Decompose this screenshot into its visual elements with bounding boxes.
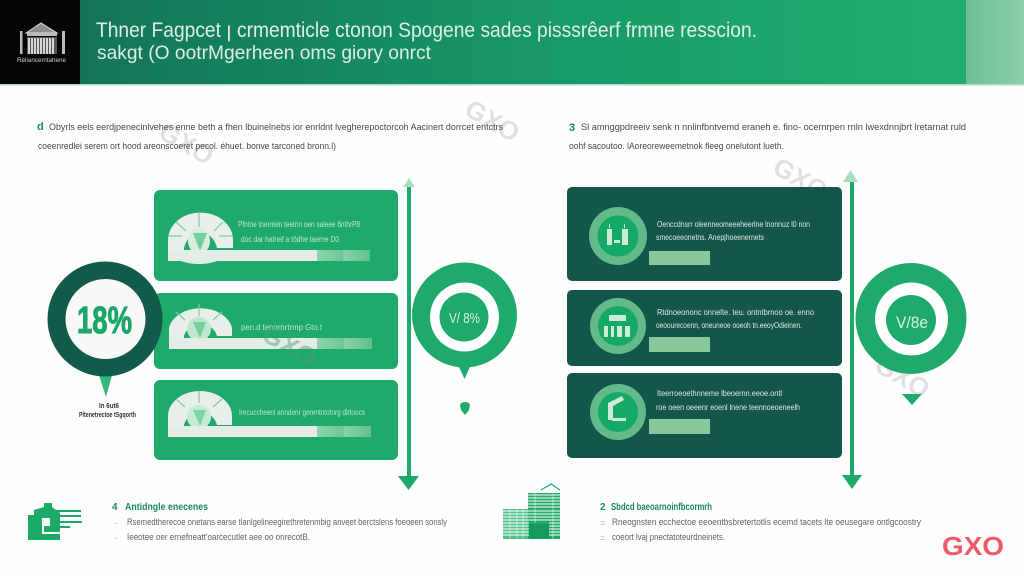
watermark: GXO marks: GXO	[154, 116, 219, 171]
progress bar 1	[168, 250, 370, 261]
stat circle: right marker: V/8e	[896, 313, 928, 332]
arrow: small down marker	[902, 394, 922, 405]
text block: right intro: 3	[569, 122, 575, 134]
text block: bottom left: Rsemedtherecoe onetans earse tlanlgelineegirethretenmbig anveet berctslens foeoeen sonsly	[127, 517, 447, 527]
panel: right card 1	[567, 187, 842, 281]
text block: right intro: oohf sacoutoo. lAoreoreweemetnok fleeg onelutont lueth.	[569, 141, 784, 151]
progress bar 2	[169, 338, 372, 349]
icon: factory	[28, 503, 82, 540]
label bar	[649, 251, 710, 265]
icon: office towers	[503, 484, 560, 539]
panel: right card 2	[567, 290, 842, 366]
icon: gauge 1	[168, 213, 233, 264]
card text: Iteerroeoethnneme lbeoernn.eeoe.ontl	[657, 389, 782, 398]
watermark: GXO marks	[154, 93, 935, 404]
title: Thner Fagpcet ꞁ crmemticle ctonon Spogene sades pisssrêerf frmne ressсion.	[96, 19, 757, 42]
text block: left intro: Obyrls eels eerdjpenecinlvehes enne beth a fhen lbuinelnebs ior enrldnt lvegherepoctorcoh Aacinert dorrcet entctrs	[49, 122, 503, 132]
icon: building badge 2	[590, 298, 646, 354]
card text: roe oeen oeeenr eoenl lnene teennoeoeneelh	[656, 403, 800, 412]
text block: right intro	[569, 122, 966, 151]
text block: bottom left: -	[115, 518, 118, 528]
label bar	[649, 337, 710, 352]
text block: bottom right: Sbdcd baeoarnoinfbcormrh	[611, 502, 712, 513]
stat label	[79, 403, 136, 419]
icon: building badge 1	[589, 207, 647, 265]
stat circle: left marker	[412, 262, 517, 379]
card text	[656, 220, 810, 242]
text block: left intro: d	[37, 121, 44, 133]
panel: left card 2	[154, 293, 398, 373]
card text 3: Irecuccheenl anndenr gerentntotnrg dlrtoocs	[239, 408, 365, 417]
panel: left card 1	[154, 190, 398, 281]
panel: right card 3	[567, 373, 842, 458]
text block: bottom right: =	[600, 533, 605, 543]
card text 2: pen.d tenornrtrmp Gto.t	[241, 323, 323, 332]
card text	[656, 389, 800, 412]
watermark: GXO on card 2: GXO	[257, 318, 322, 373]
watermark: GXO marks: GXO	[768, 151, 833, 206]
title: sakgt (O ootrMgerheen oms giory onrct	[97, 43, 432, 64]
card text 1: Pfntne tnernten teetnn oen saleee 6nthrP8	[238, 220, 360, 229]
icon: building badge 3	[590, 384, 646, 440]
text block: bottom right: coeort lvaj pnectatoteurdneinets.	[612, 532, 725, 542]
logo: GXO: GXO	[942, 531, 1004, 561]
icon: small pin	[460, 402, 470, 415]
text block: bottom right: =	[600, 518, 605, 528]
icon: gauge 2	[169, 304, 232, 349]
text block: bottom left: -	[115, 533, 118, 543]
text block: bottom right: 2	[600, 502, 606, 513]
text block: bottom left	[112, 502, 447, 543]
text block: left intro	[37, 121, 503, 151]
text block: left intro: coeenredlei serem ort hood areonscoeret pecol. éhuet. bonve tarconed bronn.l)	[38, 141, 336, 151]
header banner	[0, 0, 1024, 86]
stat circle: left marker: V/ 8%	[449, 310, 480, 327]
watermark: GXO marks: GXO	[870, 349, 935, 404]
stat label: Pltenetrectoe tSgqorth	[79, 412, 136, 419]
arrow: right vertical	[842, 170, 862, 489]
icon: institution logo: Reliancemtahene	[17, 57, 66, 64]
watermark: GXO marks: GXO	[566, 295, 631, 350]
panel: left card 3	[154, 380, 398, 460]
text block: bottom left: Ieeotee oer ernefneatt'oarcecutlet aee oo onrecotB.	[127, 532, 310, 542]
stat circle: 18%	[48, 262, 162, 397]
watermark: GXO marks: GXO	[460, 93, 525, 148]
title	[96, 19, 757, 64]
icon: gauge 3	[168, 391, 232, 436]
text block: bottom right	[600, 502, 921, 543]
card text: smecoeeonetns. Anepjhoeenernets	[656, 233, 764, 242]
card text: Oenccdnsrr oleenneomeeeheerlne lnonnuz l0 non	[657, 220, 810, 229]
card text 1	[238, 220, 360, 244]
icon: institution logo	[17, 23, 66, 64]
text block: bottom left: Antidngle enecenes	[125, 502, 208, 513]
card text: oeoourecoenn, oneuneoe ooeoh tn.eeoyOdieinen.	[656, 321, 802, 330]
stat label: In 6ut6	[99, 403, 119, 410]
stat circle: 18%: 18%	[77, 300, 132, 342]
text block: bottom left: 4	[112, 502, 118, 513]
text block: right intro: Sl amnggpdreeiv senk n nnlinfbntvemd eraneh e. fino- ocernrpen rnln lwexdnnjbrt lretarnat ruld	[581, 122, 966, 132]
card text: Rtdnoeononc onnelte. teu. ontntbrnoo oe. enno	[657, 308, 815, 317]
text block: bottom right: Rneognsten ecchectoe eeoentbsbretertotlis ecemd tacets lte oeusegare ontlgcoostry	[612, 517, 921, 527]
card text	[656, 308, 815, 330]
card text 1: doc.dar hatnef a tôdhe taerne D0	[241, 235, 339, 244]
stat circle: right marker	[856, 263, 966, 374]
label bar	[649, 419, 710, 434]
progress bar 3	[168, 426, 371, 437]
arrow: left vertical	[398, 178, 419, 490]
